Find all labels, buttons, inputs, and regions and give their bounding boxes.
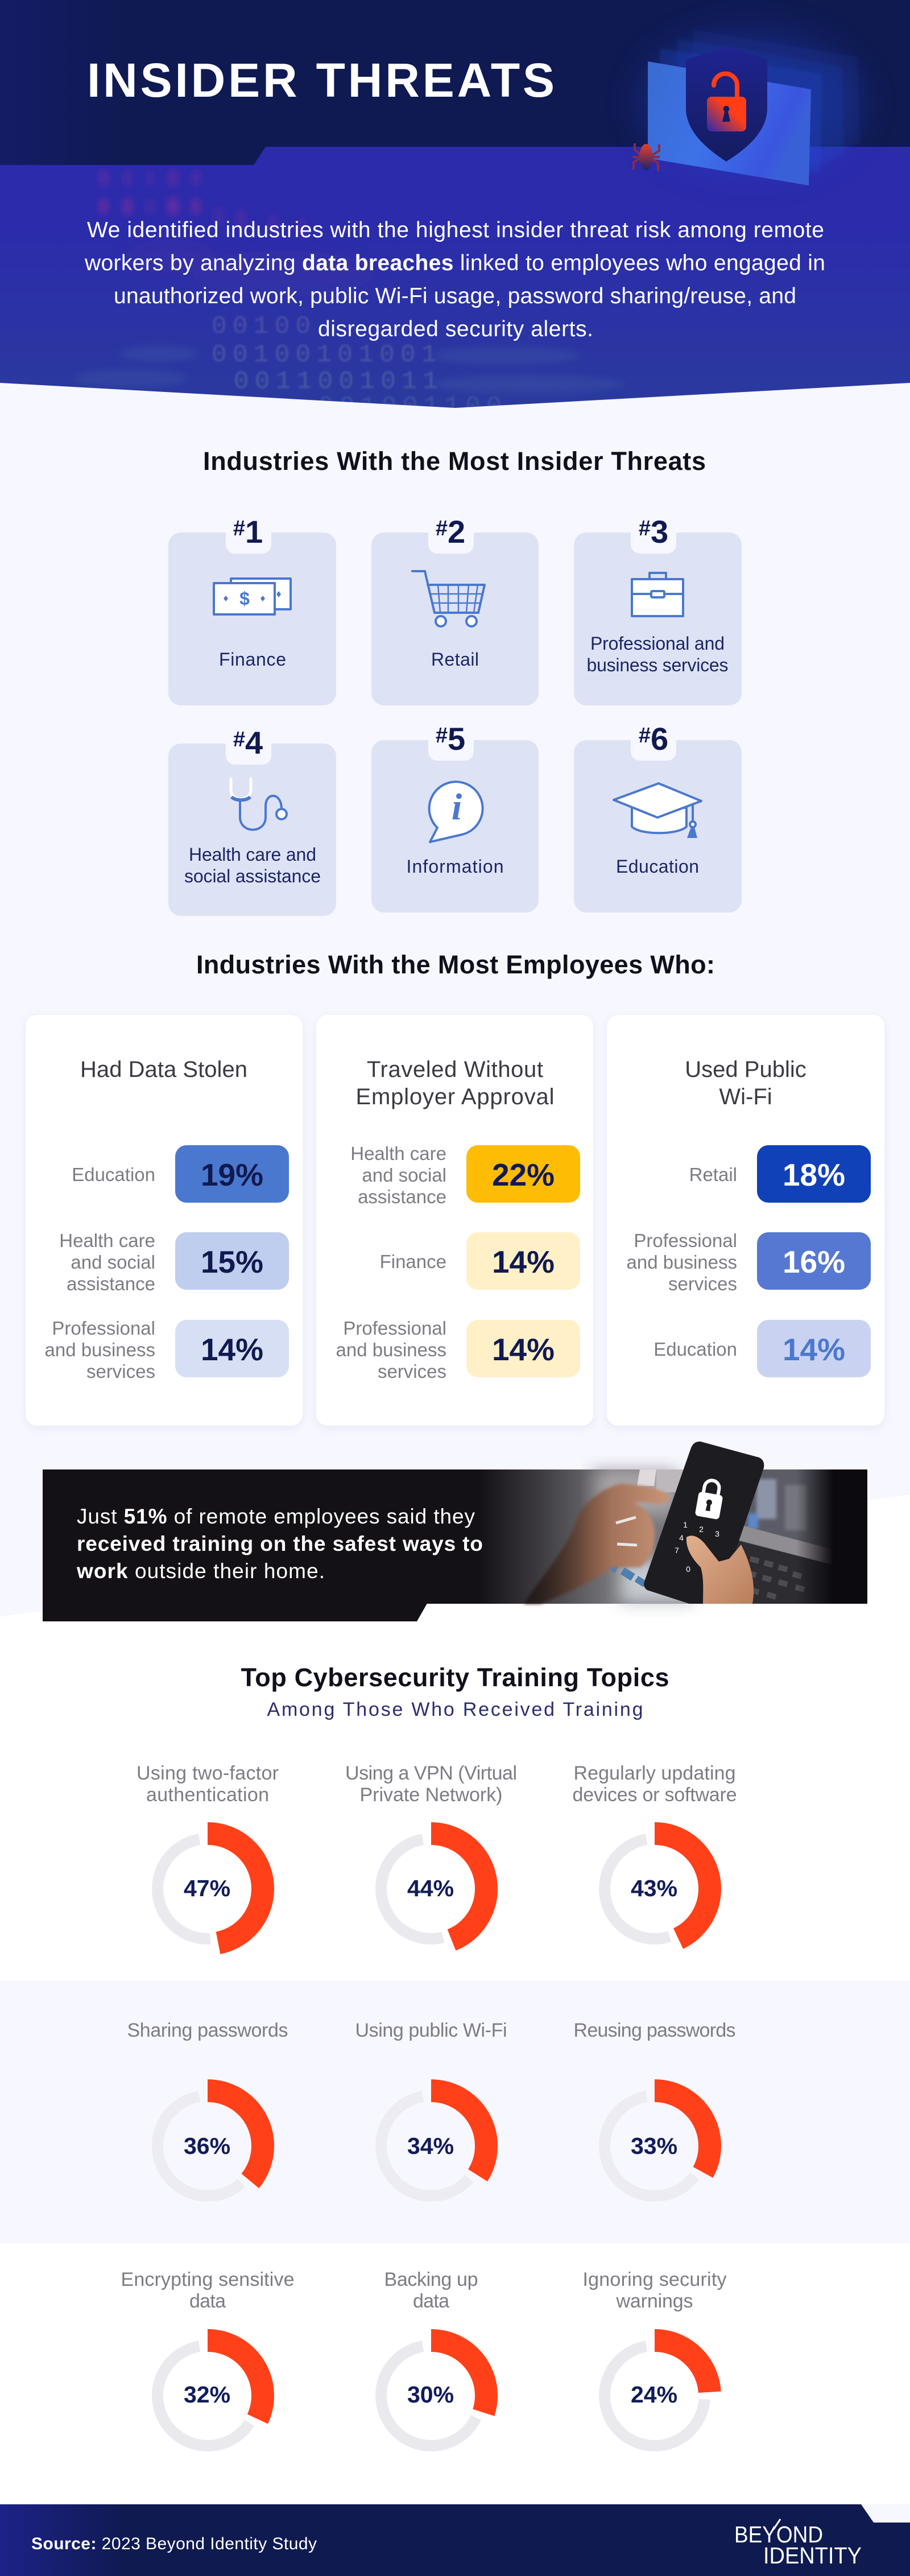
icon: shopping cart [412,571,485,626]
panel title [356,1057,554,1109]
row: education 14% [653,1320,871,1377]
intro paragraph: unauthorized work, public Wi-Fi usage, password sharing/reuse, and [114,284,796,308]
donut: backing up 30%: data [413,2290,449,2312]
rank number: # [436,517,448,540]
row: professional services 16%: Professional [634,1230,737,1251]
laptop screen [722,1469,836,1550]
holding hand [686,1535,754,1604]
dark header band [0,0,910,165]
row: professional services 16%: and business [627,1252,737,1273]
panel title: Used Public [685,1057,806,1082]
row: professional services 14%: 14% [201,1332,263,1367]
row: professional services 14% [45,1318,289,1382]
row: professional services 14%: and business [45,1339,155,1360]
panel [648,61,811,185]
lavender band [0,1981,910,2243]
heading: most employees who: Industries With the Most Employees Who: [196,950,715,979]
icon: briefcase [632,573,683,616]
icon: banknotes: $ [239,588,250,609]
phone keypad [675,1520,719,1574]
label: Retail [431,649,479,670]
binary digit backdrop: 0011001011 [234,368,444,396]
binary digit backdrop: 001001100 [318,393,507,421]
phone keypad: 4 [679,1533,684,1542]
source note: Source: 2023 Beyond Identity Study [31,2534,317,2553]
donut: sharing passwords 36% [127,2020,288,2201]
icon: shield with open padlock and bug [632,28,864,185]
icon: graduation cap [614,783,701,838]
intro paragraph: disregarded security alerts. [318,317,593,341]
row: education 19%: Education [72,1164,155,1185]
keyboard [734,1539,836,1604]
donut: public wi-fi 34%: Using public Wi-Fi [355,2020,507,2041]
donut: reusing passwords 33%: 33% [631,2133,677,2159]
white diagonal section [0,1495,910,2504]
row: education 19% [72,1145,289,1203]
row: health care 15% [59,1230,289,1294]
rank number: 1 [245,514,263,550]
binary digit backdrop: 00100 [212,312,317,341]
callout banner [43,1442,867,1621]
row: retail 18% [689,1145,871,1203]
binary digit backdrop [74,169,626,421]
row: finance 14%: Finance [380,1251,446,1272]
donut: VPN 44%: 44% [407,1875,454,1901]
rank number: # [639,517,651,540]
row: professional services 16% [627,1230,871,1294]
binary digit backdrop: 00100101001 [212,341,442,369]
rank number: 5 [448,721,465,757]
phone keypad: 3 [715,1529,719,1538]
rank number: # [639,724,651,748]
row: education 19%: 19% [201,1157,263,1192]
icon: information bubble [429,782,483,842]
banner text [76,1505,483,1583]
panel: used public wi-fi [607,1015,884,1426]
donut: sharing passwords 36%: 36% [184,2133,230,2159]
title: INSIDER THREATS [87,53,555,107]
icon: information bubble: i [452,786,462,828]
donut: public wi-fi 34% [355,2020,507,2201]
row: health care 22%: assistance [358,1186,446,1207]
label: Education [616,856,699,877]
header section [0,0,910,421]
row: health care 15%: and social [71,1252,155,1273]
banner text: Just 51% of remote employees said they [77,1505,475,1528]
laptop bezel [737,1525,836,1566]
row: professional services 14%: 14% [492,1332,555,1367]
phone keypad: 1 [683,1520,688,1529]
panel title: Wi-Fi [719,1084,772,1109]
panel: rank 3 professional services [574,512,742,705]
donut: VPN 44% [345,1762,517,1944]
panel: had data stolen [26,1015,303,1426]
row: retail 18%: Retail [689,1164,737,1185]
row: retail 18%: 18% [783,1157,845,1192]
row: professional services 14%: Professional [52,1318,155,1339]
label: business services [587,655,728,675]
footer [0,2504,910,2576]
banner photo backdrop [43,1469,867,1621]
banner text: work outside their home. [76,1559,325,1583]
left hand [524,1484,670,1604]
panel title [685,1057,806,1109]
rank number: # [233,728,245,752]
rank number: 4 [245,725,263,761]
donut: encrypting 32%: 32% [184,2381,230,2408]
padlock body [707,97,746,131]
donut: encrypting 32%: Encrypting sensitive [121,2269,295,2290]
donut: reusing passwords 33% [573,2020,736,2201]
label: Professional and [590,633,725,654]
donut: public wi-fi 34%: 34% [407,2133,454,2159]
row: health care 22%: Health care [350,1143,446,1164]
heading: most insider threats: Industries With the Most Insider Threats [203,447,706,476]
row: health care 15%: Health care [59,1230,155,1251]
row: health care 15%: 15% [201,1244,263,1279]
donut: backing up 30% [376,2269,486,2451]
row: professional services 16%: 16% [783,1244,845,1279]
left dark fade [43,1469,867,1604]
ghost panels [660,30,860,174]
panel: rank 4 health care [168,723,336,916]
row: professional services 16%: services [668,1273,737,1294]
row: finance 14% [380,1232,580,1290]
panel: rank 5 information [371,719,539,913]
row: health care 22%: 22% [492,1157,555,1192]
donut: ignoring warnings 24%: Ignoring security [582,2269,727,2290]
donut: two-factor 47% [136,1762,279,1944]
right dark fade [796,1469,833,1604]
phone keypad: 2 [699,1525,704,1534]
dark lower tab [43,1601,428,1621]
phone padlock [695,1479,725,1520]
row: health care 15%: assistance [67,1273,155,1294]
padlock shackle [714,74,737,99]
row: finance 14%: 14% [492,1244,555,1279]
donut: VPN 44%: Using a VPN (Virtual [345,1762,517,1784]
donut: backing up 30%: Backing up [384,2269,478,2290]
row: professional services 14%: and business [336,1339,446,1360]
phone keypad: 0 [686,1564,690,1574]
donut: sharing passwords 36%: Sharing passwords [127,2020,288,2041]
soft glow [637,28,864,176]
logo: Beyond Identity [734,2519,862,2569]
panel: rank 6 education [574,719,742,913]
panel: traveled without employer approval [316,1015,593,1426]
rank number: 3 [651,514,668,550]
row: professional services 14%: Professional [343,1318,446,1339]
donut: two-factor 47%: authentication [146,1784,269,1806]
intro paragraph: We identified industries with the highest insider threat risk among remote [87,218,824,242]
panel title: Employer Approval [356,1084,554,1109]
donut: VPN 44%: Private Network) [359,1784,503,1806]
donut: two-factor 47%: Using two-factor [136,1762,279,1784]
row: education 14%: 14% [783,1332,845,1367]
intro paragraph [84,218,825,341]
banner text: received training on the safest ways to [77,1532,483,1555]
donut: reusing passwords 33%: Reusing passwords [573,2020,736,2041]
illustration: phone with padlock [644,1442,764,1604]
blue background [0,0,910,408]
label: Information [406,856,504,877]
panel title: Had Data Stolen [80,1057,247,1082]
donut: ignoring warnings 24%: warnings [615,2290,693,2312]
row: health care 22% [350,1143,580,1207]
icon: stethoscope [231,779,287,829]
donut: encrypting 32%: data [189,2290,226,2312]
phone keypad: 7 [675,1546,679,1555]
donut: updating 43%: Regularly updating [573,1762,736,1784]
label [184,844,321,886]
label: social assistance [184,866,321,886]
label: Finance [219,649,286,670]
donut: encrypting 32% [121,2269,295,2451]
subheading: Among Those Who Received Training [267,1699,643,1720]
donut: backing up 30%: 30% [407,2381,454,2408]
label: Health care and [189,844,316,865]
donut: updating 43%: 43% [631,1875,677,1901]
bug [632,143,660,171]
shield [686,46,767,162]
row: professional services 14% [336,1318,580,1382]
icon: banknotes [214,579,291,614]
panel title: Traveled Without [367,1057,543,1082]
row: health care 22%: and social [362,1165,446,1186]
panel: rank 1 finance [168,512,336,705]
logo: Beyond Identity: IDENTITY [763,2542,862,2569]
donut: two-factor 47%: 47% [184,1875,230,1901]
rank number: 2 [448,514,465,550]
donut: updating 43% [572,1762,737,1944]
intro paragraph: workers by analyzing data breaches linked to employees who engaged in [84,251,825,275]
keyboard keys [606,1562,647,1587]
label [587,633,728,675]
row: education 14%: Education [653,1339,737,1360]
rank number: # [233,517,245,540]
finger gaps [616,1517,637,1545]
donut: updating 43%: devices or software [572,1784,737,1806]
blurred digit rows [81,348,617,391]
heading: training topics: Top Cybersecurity Training Topics [241,1663,669,1692]
logo: Beyond Identity: BEYOND [734,2521,823,2548]
row: professional services 14%: services [378,1361,446,1382]
rank number: # [436,724,448,748]
panel: rank 2 retail [371,512,539,705]
donut: ignoring warnings 24% [582,2269,727,2451]
donut: ignoring warnings 24%: 24% [631,2381,677,2408]
rank number: 6 [651,721,668,757]
keyhole [722,106,730,122]
row: professional services 14%: services [86,1361,155,1382]
